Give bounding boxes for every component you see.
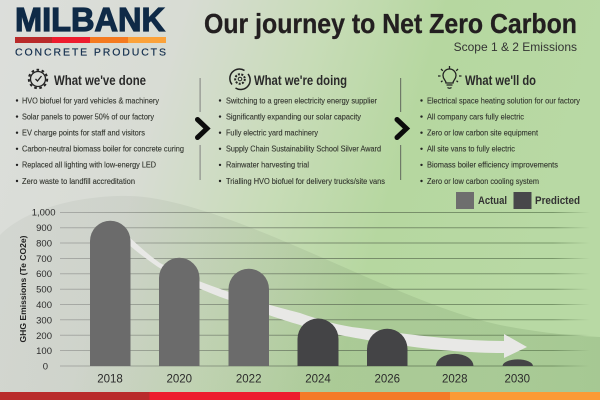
bar: 2026 [367,329,408,366]
trend arrow [128,236,527,358]
logo tagline: CONCRETE PRODUCTS [15,46,166,58]
icon: chevron [198,120,207,138]
y axis labels: 100 [36,346,52,357]
bullet list [219,96,385,186]
y axis labels [32,208,56,373]
bar: 2024 [298,319,338,366]
x axis labels: 2030 [505,374,530,386]
bullet list: Significantly expanding our solar capacity [226,112,362,121]
column: what we'll do [420,66,581,186]
legend: actual: Actual [478,195,507,207]
bar: 2028 [436,354,474,366]
bullet list: Biomass boiler efficiency improvements [427,161,558,170]
icon: cycle gear [230,69,250,90]
x axis labels: 2026 [375,374,400,386]
bullet list: Trialling HVO biofuel for delivery trucks/site vans [226,177,385,186]
bullet list: Supply Chain Sustainability School Silver Award [226,145,381,154]
y axis labels: 600 [36,269,52,280]
bullet list: Zero or low carbon cooling system [427,177,539,186]
logo wordmark: MILBANK [15,1,165,38]
x axis labels: 2018 [97,374,123,386]
bullet list: HVO biofuel for yard vehicles & machinery [22,96,160,105]
y axis labels: 1,000 [32,208,56,218]
y axis labels: 200 [36,331,52,342]
y axis labels: 900 [36,223,52,234]
bars [90,221,533,366]
bullet list: Carbon-neutral biomass boiler for concrete curing [22,145,184,154]
heading: What we're doing [254,73,347,88]
divider and arrow 2 [397,78,406,180]
column: what we've done [16,70,184,186]
subtitle: Scope 1 & 2 Emissions [454,40,577,54]
logo stripe [15,37,166,43]
bar: 2018 [90,221,130,366]
y axis labels: 0 [43,362,48,373]
icon: light bulb [438,66,462,88]
bullet list: Zero or low carbon site equipment [427,128,539,138]
x axis labels: 2022 [236,374,261,386]
bar: 2020 [159,258,200,366]
heading: What we've done [54,73,146,88]
x axis labels [97,374,530,386]
bullet list: Electrical space heating solution for our factory [427,96,581,105]
column: what we're doing [219,69,385,186]
bullet list: Replaced all lighting with low-energy LED [22,161,156,170]
bullet list: Solar panels to power 50% of our factory [22,112,155,121]
divider and arrow 1 [198,78,207,180]
bar: 2030 [502,359,533,366]
bullet list: All site vans to fully electric [427,145,515,154]
bullet list: Switching to a green electricity energy supplier [226,96,377,105]
x axis labels: 2028 [442,374,468,386]
y axis labels: 700 [36,254,52,265]
legend: predicted: Predicted [535,195,580,207]
bottom colour band [0,392,600,400]
y axis title: GHG Emissions (Te CO2e) [18,235,28,342]
y axis labels: 400 [36,300,52,311]
x axis labels: 2024 [305,374,331,386]
bar chart [18,208,590,386]
icon: chevron [397,120,406,138]
bullet list: EV charge points for staff and visitors [22,128,145,138]
bullet list [420,96,581,186]
bullet list: Fully electric yard machinery [226,128,319,138]
background swoosh [0,196,600,392]
bullet list [16,96,184,186]
heading: What we'll do [465,73,536,88]
bullet list: Rainwater harvesting trial [226,161,309,170]
y axis labels: 800 [36,238,52,249]
bullet list: Zero waste to landfill accreditation [22,177,135,186]
legend [456,192,580,209]
logo [15,1,166,58]
bullet list: All company cars fully electric [427,112,524,121]
bar: 2022 [228,269,269,366]
y axis labels: 300 [36,315,52,326]
x axis labels: 2020 [167,374,192,386]
icon: gear with check [29,70,47,88]
y axis labels: 500 [36,285,52,296]
